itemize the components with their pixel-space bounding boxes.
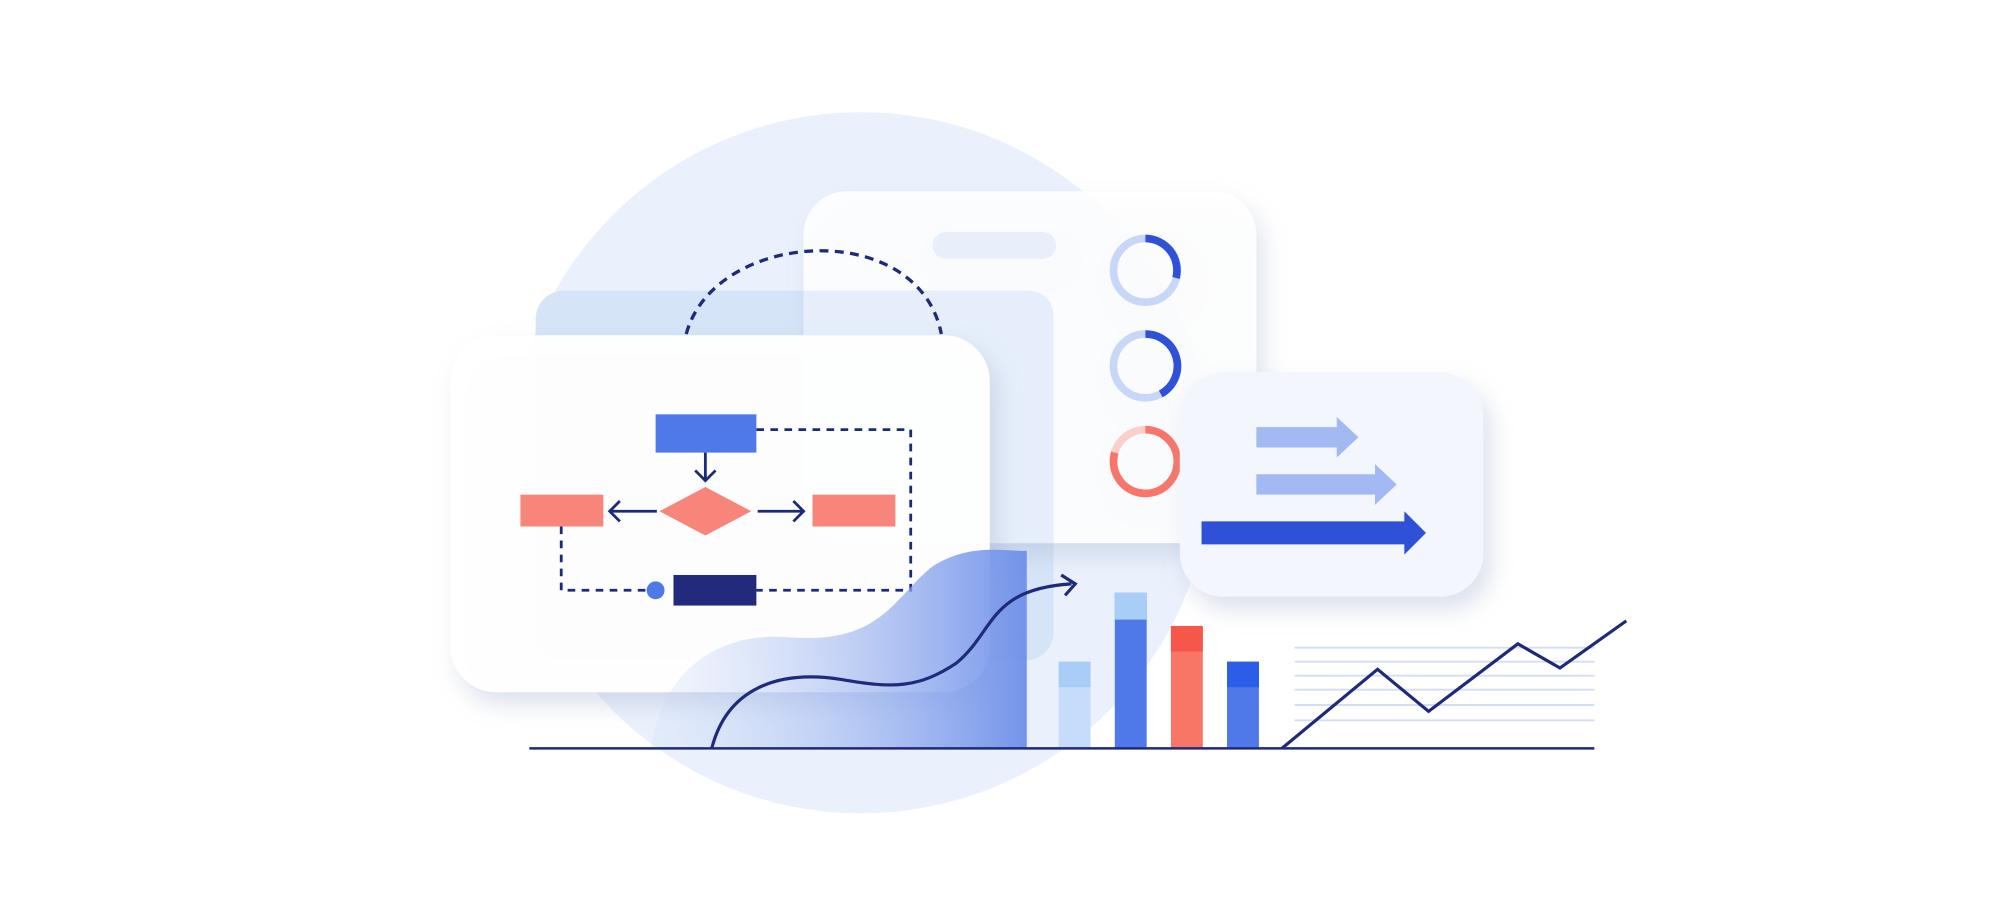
dot (647, 581, 665, 599)
flow arrows (610, 453, 804, 521)
right box (812, 495, 895, 527)
bottom box (673, 575, 756, 606)
panel: arrows card (1180, 372, 1483, 597)
panel: dashboard card (804, 191, 1256, 543)
dashed connectors (561, 430, 911, 590)
arrow light 2 (1256, 464, 1397, 505)
back panel overlay (804, 291, 1054, 543)
donut 3 (1114, 430, 1177, 493)
panel: flowchart card (450, 335, 990, 692)
dashed arc (686, 251, 941, 334)
left box (520, 495, 603, 527)
pill (932, 232, 1056, 259)
arrow light 1 (1256, 417, 1358, 458)
line chart (1282, 621, 1626, 748)
baseline (529, 747, 1594, 749)
donut 2 (1114, 334, 1177, 398)
wave area (651, 550, 1027, 748)
background circle (510, 112, 1212, 813)
bar chart (1059, 593, 1259, 748)
curved arrow (712, 575, 1075, 748)
back panel (536, 291, 1054, 660)
donut 1 (1114, 238, 1177, 302)
top box (656, 414, 756, 453)
decision diamond (659, 487, 751, 535)
arrow dark (1202, 511, 1426, 555)
